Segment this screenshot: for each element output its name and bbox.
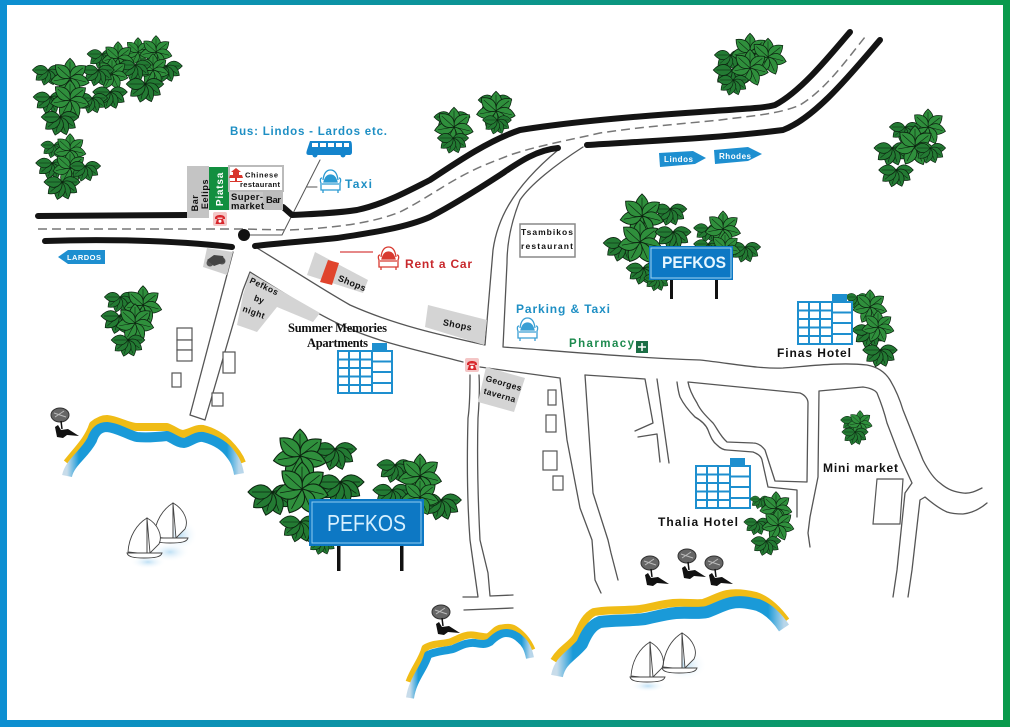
tree cluster: top centre [434,91,517,154]
main road: centre dashed line [38,37,865,230]
sign text: PEFKOS [327,510,406,536]
tree cluster: behind small Pefkos sign [603,194,761,292]
sunbather: south east 2 [678,549,706,579]
shops block east [425,305,487,345]
main road: black edges [38,32,880,247]
rent a car connector [340,251,373,253]
label: Shops: Shops [337,273,368,293]
tree cluster: behind big Pefkos sign [248,429,461,556]
Summer Memories Apartments label: Summer Memories [288,321,387,335]
Summer Memories Apartments hotel icon [338,343,392,393]
label: Piatsa: Piatsa [215,172,226,206]
houses [172,328,903,524]
label: restaurant: restaurant [521,241,573,251]
sunbather: south east 3 [705,556,733,586]
Georges taverna block [478,367,525,412]
tree cluster: left [101,286,163,358]
beach: south east [554,593,786,676]
label: Shops: Shops [442,317,473,333]
label: Pefkos: Pefkos [248,275,280,297]
Summer Memories Apartments label [288,321,387,350]
direction sign: Lindos [659,151,706,167]
direction sign: Rhodes: Rhodes [719,152,752,161]
direction sign: Lardos [58,250,105,264]
label: restaurant: restaurant [240,180,280,189]
small Pefkos sign [649,246,733,299]
corner shops block [187,166,283,218]
big Pefkos sign [309,499,424,571]
label: taverna: taverna [483,386,517,404]
tree cluster: top left [32,36,182,201]
label: night: night [241,304,267,321]
shops block with red stripe [307,252,368,293]
sign text: PEFKOS [662,254,726,272]
Thalia Hotel label: Thalia Hotel [658,515,738,529]
sailboats: south [630,633,707,692]
icon: pharmacy cross [636,341,648,353]
Pefkos by night block [237,273,320,332]
icon: bus [306,141,352,158]
label: Georges: Georges [485,373,523,393]
label: Super-: Super- [231,192,263,203]
icon: phone at junction [213,212,227,226]
junction dot [238,229,250,241]
Thalia Hotel icon [696,458,750,508]
parking and taxi label: Parking & Taxi [516,302,610,316]
sunbather: south east 1 [641,556,669,586]
icon: taxi [320,170,341,193]
tree: Mini market [841,411,873,446]
label: Bar: Bar [190,195,200,211]
beach: south centre [409,627,532,698]
label: Chinese: Chinese [245,170,278,180]
icon: pagoda [229,168,243,182]
Tsambikos restaurant box [520,224,575,257]
taxi label: Taxi [345,177,372,191]
sunbather: west beach [51,408,79,438]
label: Eelips: Eelips [200,179,210,209]
tree cluster: far right [874,109,947,188]
Mini market label: Mini market [823,461,898,475]
icon: rental car [378,247,399,270]
label: Tsambikos: Tsambikos [521,227,573,237]
tree cluster: Thalia Hotel [744,492,795,557]
tree cluster: top right [713,33,788,96]
tree cluster: Finas Hotel [845,290,897,368]
Finas Hotel icon [798,294,852,344]
icon: parking taxi [517,318,538,341]
direction sign: Rhodes [714,147,762,164]
rent a car label: Rent a Car [405,257,472,271]
beach: west [67,419,242,476]
pharmacy label: Pharmacy [569,338,635,350]
label: by: by [253,293,266,306]
label: market: market [231,201,265,212]
sailboats: west [127,503,198,569]
thin street network [190,147,987,610]
direction sign: Lardos: LARDOS [67,253,101,262]
icon: phone on road [465,358,479,372]
Finas Hotel label: Finas Hotel [777,346,851,360]
sunbather: south centre beach [432,605,460,635]
bus label: Bus: Lindos - Lardos etc. [230,126,387,138]
motorbike block [203,248,233,275]
label: Bar east: Bar [266,195,281,206]
direction sign: Lindos: Lindos [664,155,694,164]
Summer Memories Apartments label: Apartments [307,336,368,350]
